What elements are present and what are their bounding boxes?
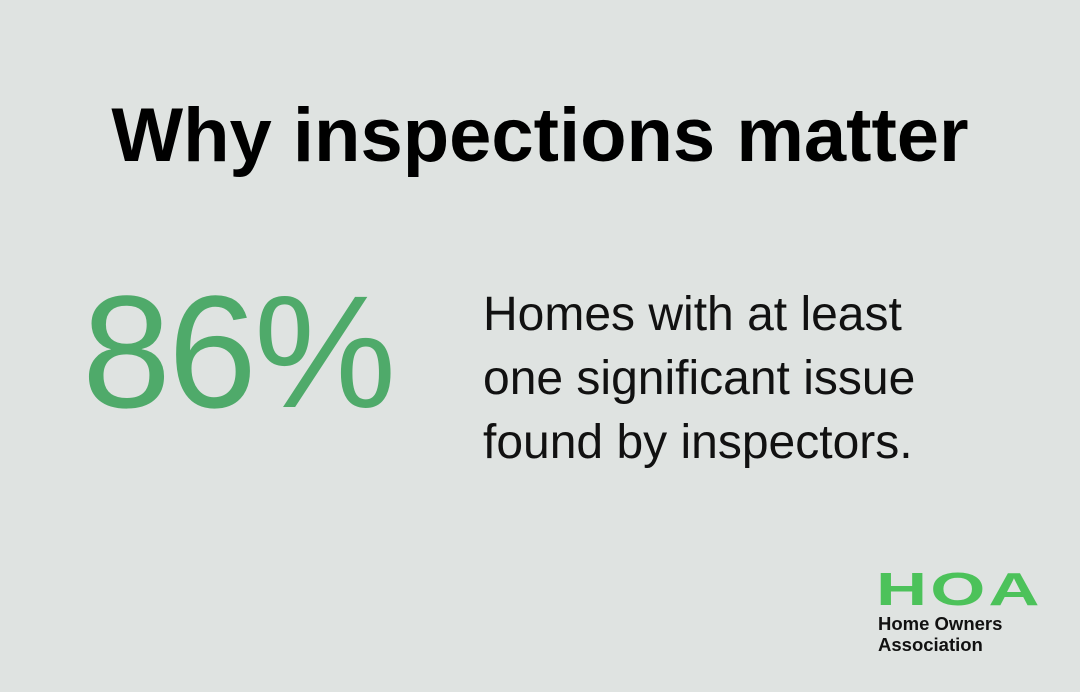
logo text: Association bbox=[878, 634, 983, 655]
stat description: one significant issue bbox=[483, 352, 915, 405]
stat description: found by inspectors. bbox=[483, 416, 913, 469]
logo text bbox=[878, 613, 1002, 655]
logo: HOA bbox=[876, 563, 1043, 655]
logo letters: HOA bbox=[876, 563, 1043, 615]
stat description bbox=[483, 288, 915, 469]
stat description: Homes with at least bbox=[483, 288, 902, 341]
logo text: Home Owners bbox=[878, 613, 1002, 634]
title: Why inspections matter bbox=[111, 93, 969, 178]
statistic: 86%: 86% bbox=[82, 262, 393, 441]
